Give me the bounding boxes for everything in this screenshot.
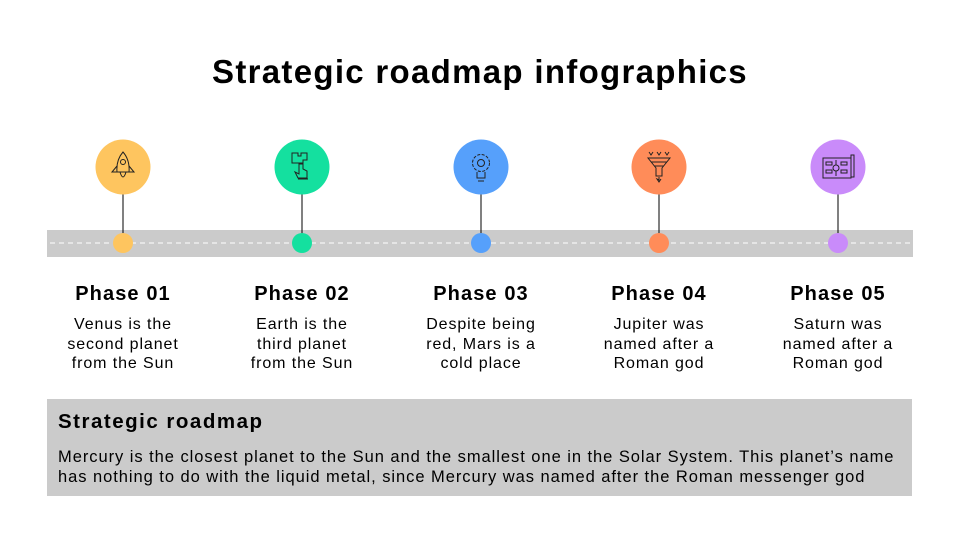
phase 3: cold place [440,355,522,372]
summary box [47,399,912,496]
phase 5: Saturn was [793,316,883,333]
phase 4: named after a [604,336,714,352]
phase 2: Phase 02 [254,283,350,305]
phase 1: Venus is the [74,316,172,333]
summary box: Strategic roadmap [58,410,264,433]
timeline [47,140,913,257]
phase 4: Phase 04 [611,283,707,305]
phase 1: second planet [67,336,179,352]
phase 1: from the Sun [72,355,174,372]
phase 1: Phase 01 [75,283,171,305]
phase 2: Earth is the [256,316,348,333]
phase 5 [783,283,893,372]
milestone 1 [96,140,150,253]
phase 4: Roman god [614,355,704,372]
milestone 5 [810,140,866,253]
phase 3: Despite being [426,316,536,333]
phase 3 [426,283,536,372]
summary box: has nothing to do with the liquid metal, since Mercury was named after the Roman messenger god [58,468,865,486]
title: Strategic roadmap infographics [212,53,748,90]
milestone 2 [274,140,330,253]
phase 3: Phase 03 [433,283,529,305]
milestone 3 [454,140,508,253]
phase 5: Phase 05 [790,283,886,305]
phase 2 [250,283,353,372]
phase 1 [67,283,179,372]
milestone 4 [632,140,686,253]
phase 3: red, Mars is a [426,336,536,352]
phase 2: third planet [257,336,347,352]
phase 4 [604,283,714,372]
phase 4: Jupiter was [614,316,704,333]
phase 5: Roman god [793,355,883,372]
phase 2: from the Sun [251,355,353,372]
summary box: Mercury is the closest planet to the Sun and the smallest one in the Solar System. This planet’s name [58,448,894,466]
phase 5: named after a [783,336,893,352]
